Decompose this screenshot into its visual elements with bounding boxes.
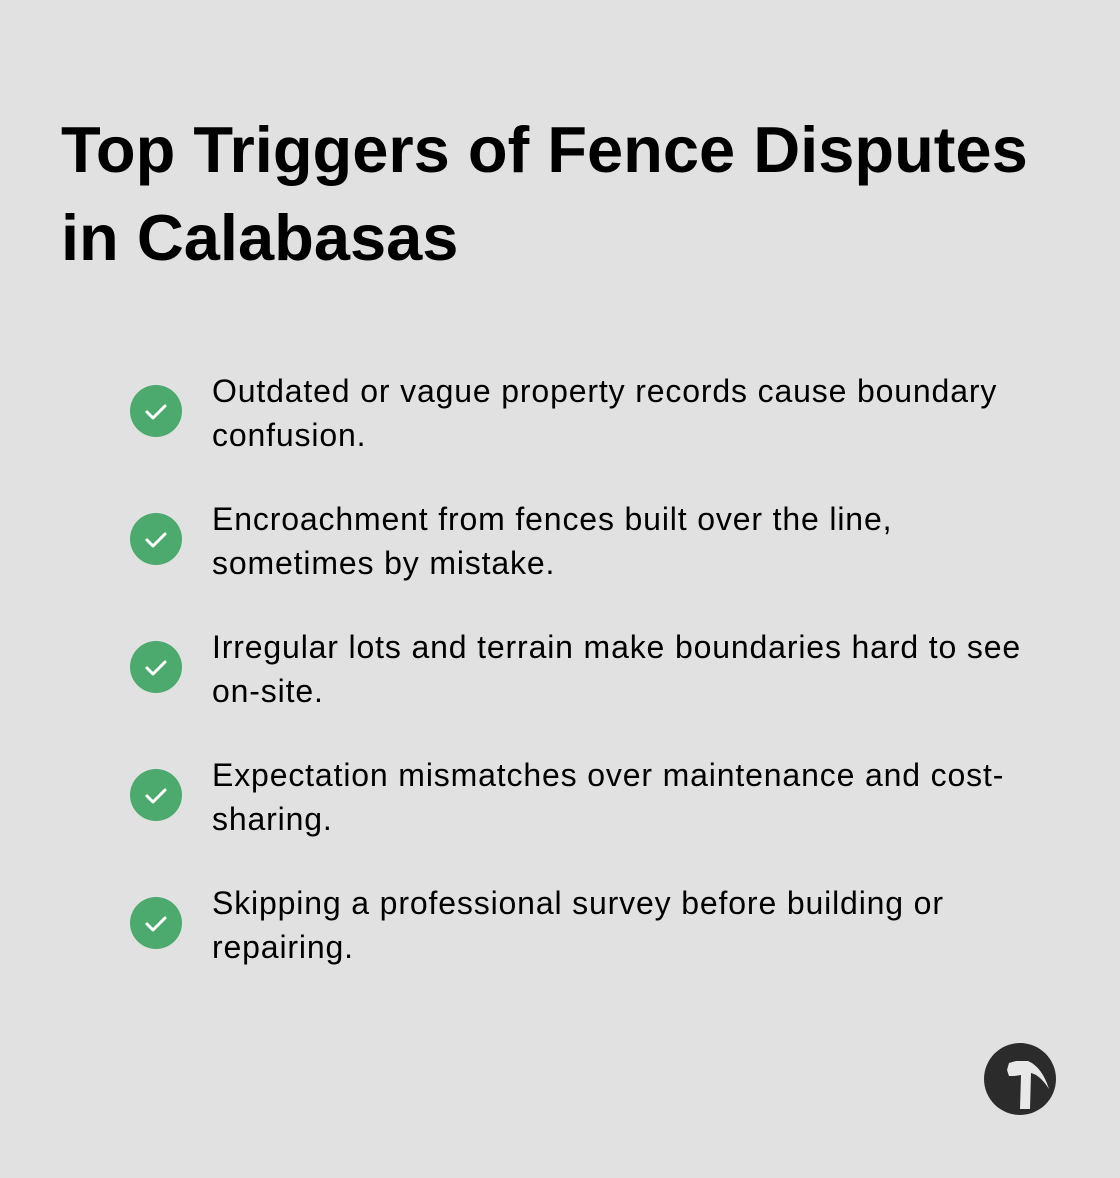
text <box>212 629 1021 709</box>
text: Outdated or vague property records cause boundary <box>212 373 997 409</box>
text <box>212 373 997 453</box>
icon: check <box>130 385 182 437</box>
list item 5 <box>130 885 944 965</box>
text <box>212 885 944 965</box>
icon: check <box>130 897 182 949</box>
title <box>61 113 1028 274</box>
icon: check <box>130 641 182 693</box>
title: in Calabasas <box>61 201 458 274</box>
list item 1 <box>130 373 997 453</box>
text <box>212 757 1004 837</box>
logo: hammer <box>984 1043 1056 1115</box>
text: Skipping a professional survey before building or <box>212 885 944 921</box>
text: sharing. <box>212 801 333 837</box>
text: confusion. <box>212 417 366 453</box>
text: Encroachment from fences built over the line, <box>212 501 892 537</box>
text: on-site. <box>212 673 324 709</box>
list item 4 <box>130 757 1004 837</box>
title: Top Triggers of Fence Disputes <box>61 113 1028 186</box>
icon: check <box>130 513 182 565</box>
text: Expectation mismatches over maintenance and cost- <box>212 757 1004 793</box>
text: sometimes by mistake. <box>212 545 555 581</box>
text: Irregular lots and terrain make boundaries hard to see <box>212 629 1021 665</box>
list item 3 <box>130 629 1021 709</box>
text <box>212 501 892 581</box>
icon: check <box>130 769 182 821</box>
list item 2 <box>130 501 892 581</box>
text: repairing. <box>212 929 354 965</box>
